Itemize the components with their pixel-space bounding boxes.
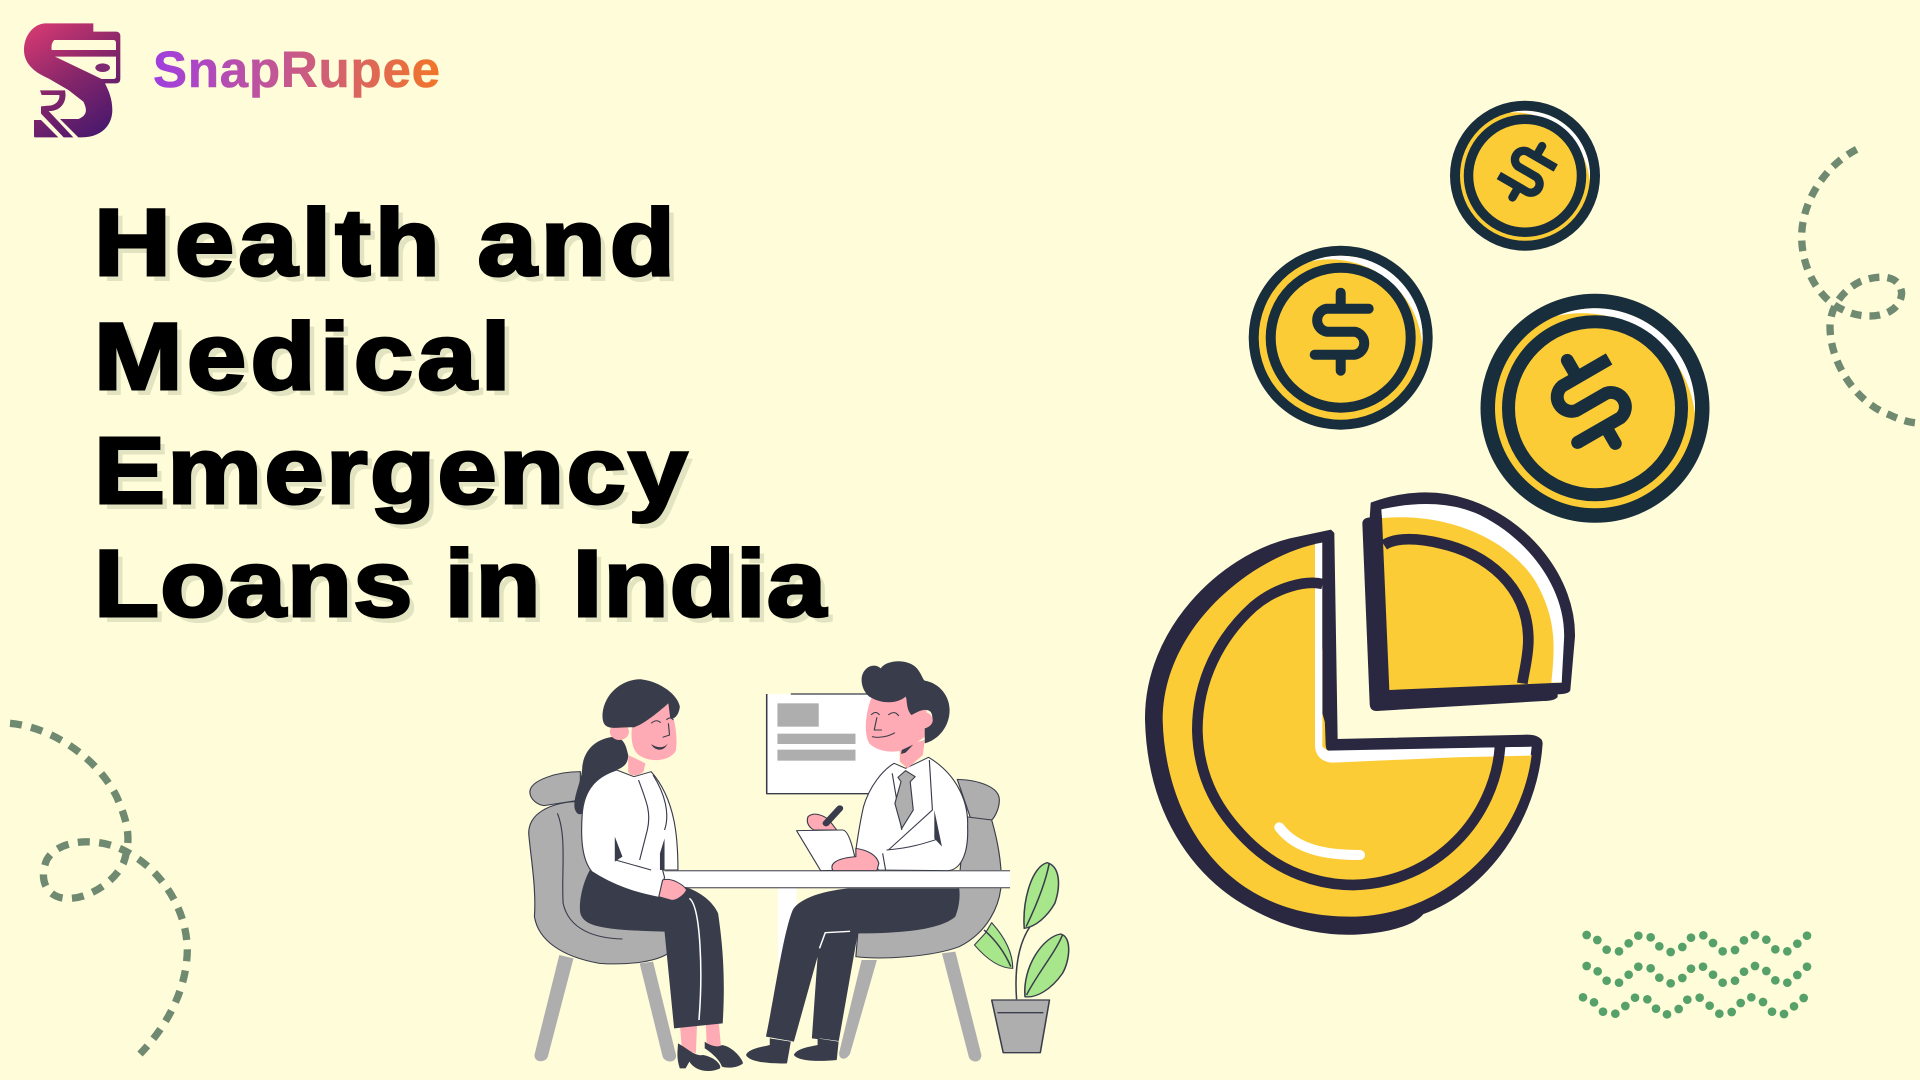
title: Health and: [94, 190, 679, 296]
pie quarter slice: [1363, 493, 1574, 710]
decoration: dashed loop right: [1802, 149, 1920, 423]
man: [746, 661, 968, 1063]
title: Loans in India: [94, 531, 827, 637]
icon: pie chart: [1146, 493, 1574, 934]
icon: small coin: [1450, 101, 1600, 251]
left chair: [529, 772, 676, 1061]
woman: [574, 679, 743, 1071]
icon: medium coin: [1249, 246, 1433, 430]
board: [767, 694, 899, 794]
title: Medical: [94, 304, 514, 410]
decoration: dashed loop left: [10, 723, 187, 1054]
pie main slice: [1146, 531, 1542, 934]
table: [665, 871, 1010, 961]
title: [94, 190, 833, 637]
right chair: [839, 779, 1001, 1061]
icon: large coin: [1480, 294, 1710, 523]
logo mark: [24, 23, 120, 137]
decoration: dotted waves: [1579, 931, 1811, 1019]
plant: [974, 863, 1069, 1053]
logo wordmark: SnapRupee: [153, 41, 440, 98]
title: Emergency: [94, 418, 689, 524]
illustration: consultation scene: [529, 661, 1069, 1071]
logo: SnapRupee: [24, 23, 440, 137]
